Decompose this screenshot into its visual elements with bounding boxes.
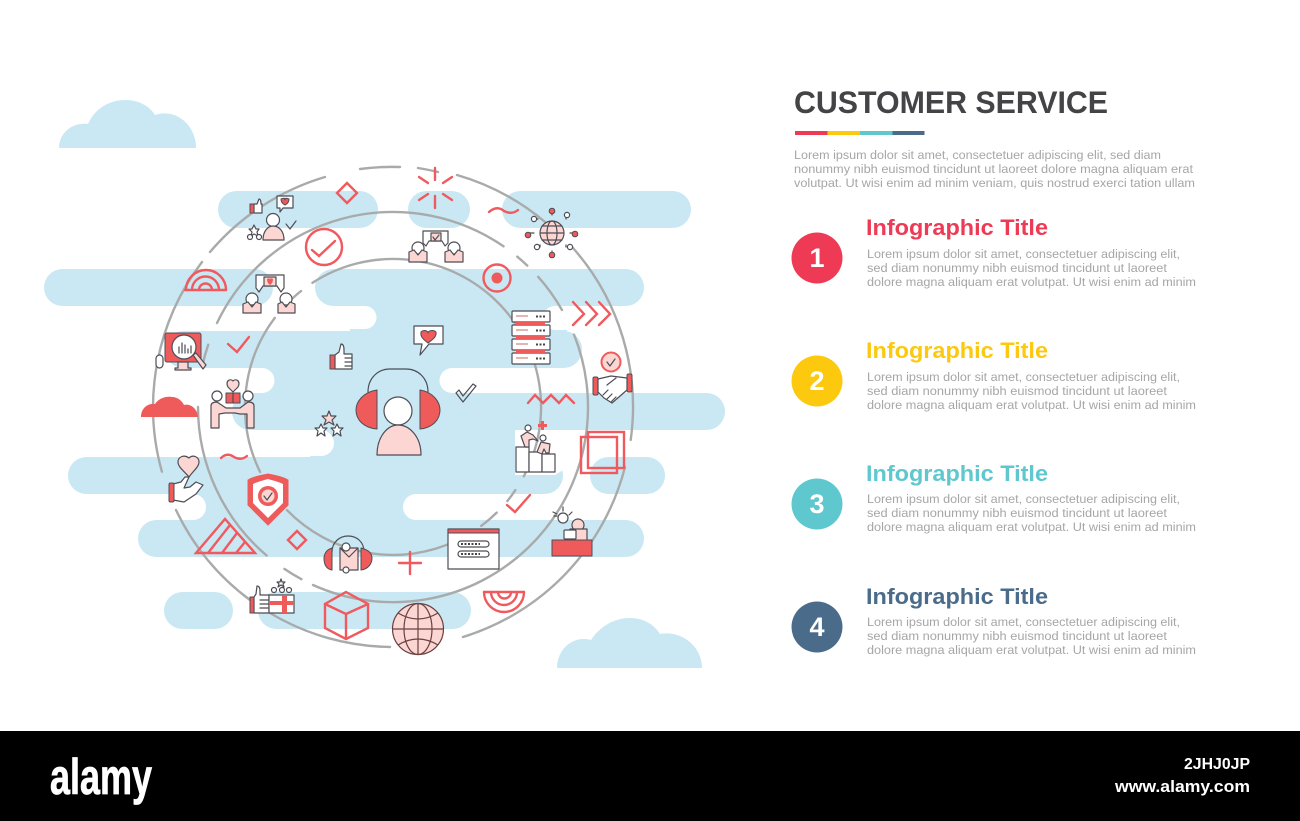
item 2: dolore magna aliquam erat volutpat. Ut wisi enim ad minim	[867, 398, 1196, 412]
icon: hand holding heart	[169, 456, 203, 502]
footer bar	[0, 731, 1300, 821]
icon: red check	[228, 337, 249, 352]
intro text: volutpat. Ut wisi enim ad minim veniam, quis nostrud exerci tation ullam	[794, 176, 1195, 190]
icon: two people with check bubble	[409, 231, 463, 262]
icon: monitor with magnifier	[156, 333, 206, 370]
icon: diamond	[337, 183, 357, 203]
icon: three stars	[315, 411, 343, 436]
icon: team on podium	[516, 421, 555, 472]
icon: handshake with badge	[593, 352, 632, 403]
icon: customer with thumbs up, heart bubble and stars	[248, 196, 296, 240]
item 2: Lorem ipsum dolor sit amet, consectetuer adipiscing elit,	[867, 370, 1180, 384]
title underline	[795, 131, 924, 135]
icon: central customer with headset	[356, 369, 440, 455]
icon: target	[484, 264, 510, 292]
item 3	[792, 461, 1196, 534]
item 3: sed diam nonummy nibh euismod tincidunt ut laoreet	[867, 506, 1168, 520]
icon: zigzag	[528, 395, 574, 403]
item 3: 3	[809, 489, 825, 519]
item 1: Infographic Title	[866, 215, 1048, 240]
icon: tilde wave	[221, 455, 247, 459]
item 3: Infographic Title	[866, 461, 1048, 486]
item 2: 2	[809, 366, 825, 396]
icon: plus	[399, 552, 421, 574]
icon: cube	[325, 592, 368, 639]
icon: thumbs up	[330, 344, 352, 369]
icon: server stack	[512, 311, 550, 364]
item 4: Infographic Title	[866, 584, 1048, 609]
icon: heart speech bubble	[414, 326, 443, 355]
item 4	[792, 584, 1196, 657]
item 2: sed diam nonummy nibh euismod tincidunt ut laoreet	[867, 384, 1168, 398]
footer bar: alamy	[50, 749, 152, 805]
icon: rainbow arch	[185, 270, 226, 290]
item 3: Lorem ipsum dolor sit amet, consectetuer adipiscing elit,	[867, 492, 1180, 506]
item 1: 1	[809, 243, 825, 273]
item 1: Lorem ipsum dolor sit amet, consectetuer adipiscing elit,	[867, 247, 1180, 261]
icon: burst	[419, 168, 452, 208]
title: CUSTOMER SERVICE	[794, 84, 1108, 120]
footer bar: 2JHJ0JP	[1184, 756, 1250, 773]
icon: red cloud	[141, 397, 198, 417]
icon: lightbulb and desk	[552, 507, 592, 556]
item 1	[792, 215, 1196, 289]
item 4: sed diam nonummy nibh euismod tincidunt ut laoreet	[867, 629, 1168, 643]
icon: shield with check badge	[248, 474, 288, 525]
icon: two people with heart bubble	[243, 275, 295, 313]
icon: network globe	[525, 208, 578, 258]
item 1: dolore magna aliquam erat volutpat. Ut wisi enim ad minim	[867, 275, 1196, 289]
icon: gift with thumbs up	[250, 579, 294, 613]
icon: outline check	[456, 384, 476, 402]
icon: striped triangle	[196, 519, 255, 553]
icon: tilde wave	[489, 208, 518, 213]
icon: check in circle	[306, 229, 342, 265]
item 4: Lorem ipsum dolor sit amet, consectetuer adipiscing elit,	[867, 615, 1180, 629]
icon: globe	[392, 604, 444, 654]
background blobs	[44, 100, 725, 668]
icon: red check	[507, 495, 530, 512]
icon: chevrons	[573, 302, 610, 325]
intro text	[794, 148, 1195, 190]
icon: login window	[448, 529, 499, 569]
footer bar: www.alamy.com	[1114, 777, 1250, 796]
intro text: nonummy nibh euismod tincidunt ut laoreet dolore magna aliquam erat	[794, 162, 1194, 176]
icon: diamond	[288, 531, 306, 549]
intro text: Lorem ipsum dolor sit amet, consectetuer adipiscing elit, sed diam	[794, 148, 1161, 162]
icon: two people with gift	[211, 380, 254, 428]
icon: inverted rainbow	[484, 592, 524, 612]
item 4: dolore magna aliquam erat volutpat. Ut wisi enim ad minim	[867, 643, 1196, 657]
item 1: sed diam nonummy nibh euismod tincidunt ut laoreet	[867, 261, 1168, 275]
item 4: 4	[809, 612, 825, 642]
item 2: Infographic Title	[866, 338, 1048, 363]
concentric dashed rings	[153, 167, 633, 647]
icon: overlapping squares	[581, 432, 624, 473]
item 2	[792, 338, 1196, 412]
item 3: dolore magna aliquam erat volutpat. Ut wisi enim ad minim	[867, 520, 1196, 534]
icon: headset agent	[324, 536, 372, 573]
